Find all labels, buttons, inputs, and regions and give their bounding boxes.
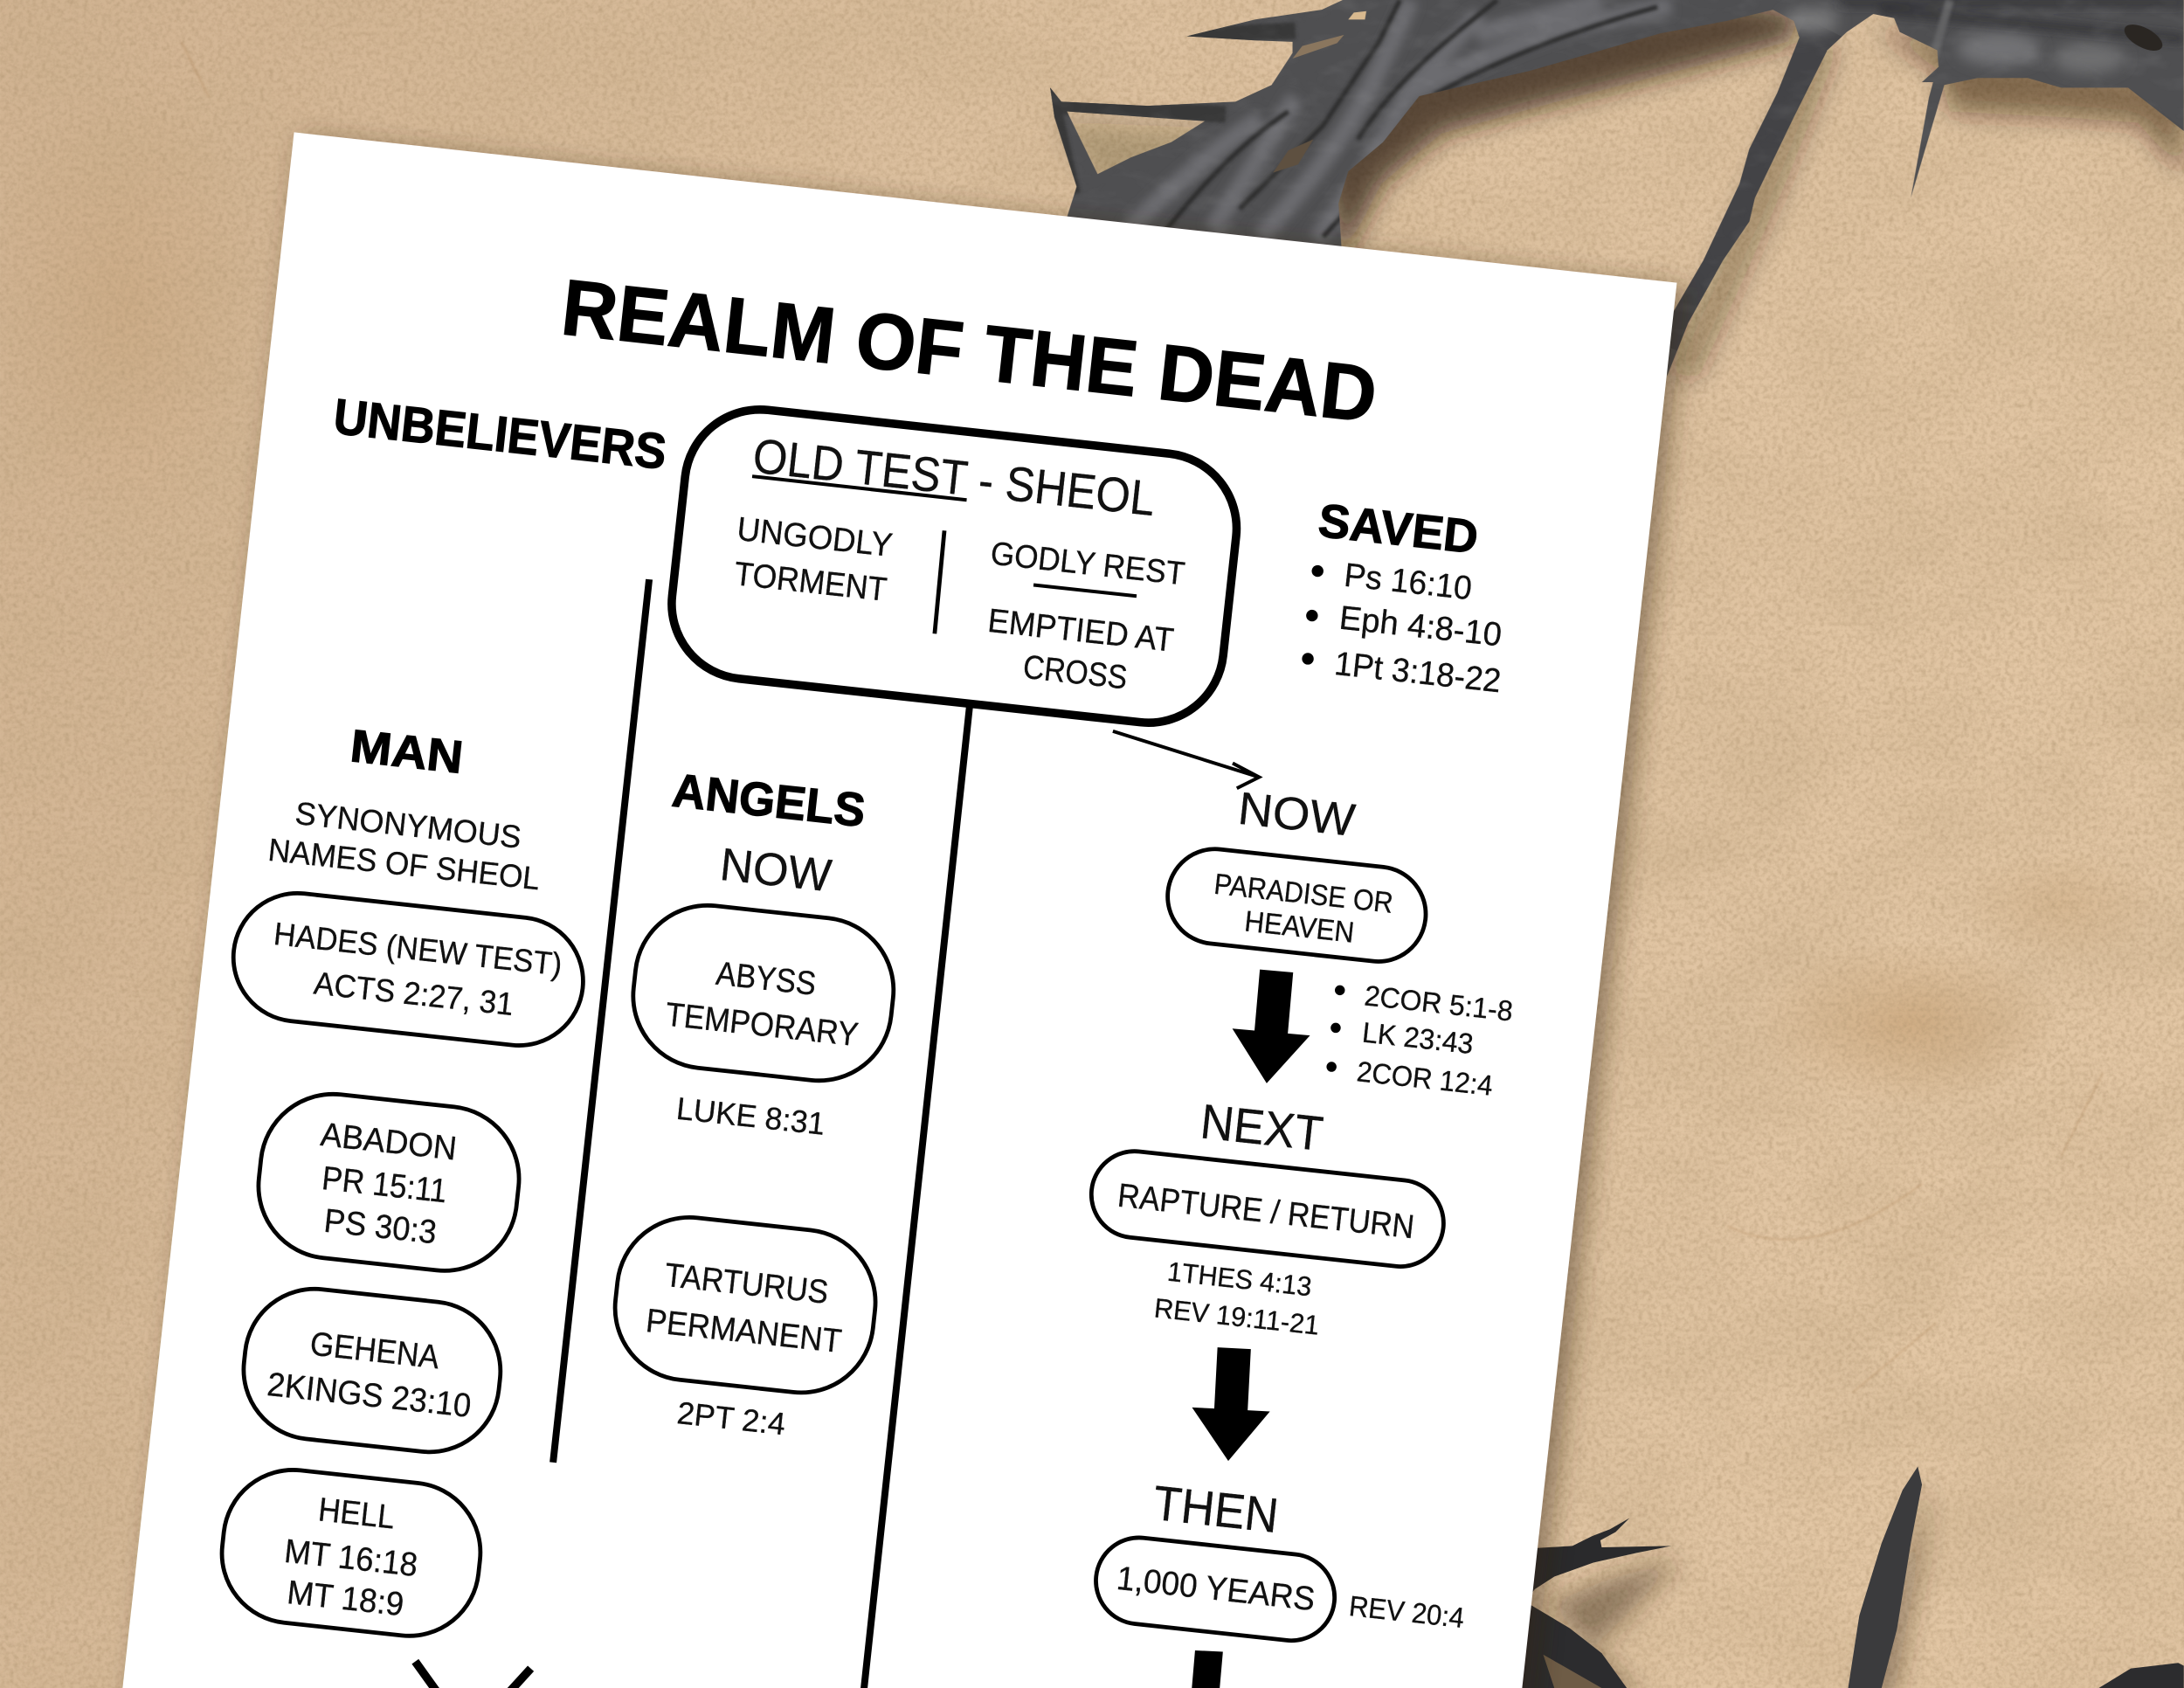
pill: hades: ACTS 2:27, 31 — [312, 965, 515, 1022]
pill: 1,000 years — [1091, 1533, 1339, 1645]
arrow: now to next — [1227, 967, 1316, 1087]
emptied at cross text — [986, 602, 1176, 696]
references: next — [1153, 1256, 1321, 1341]
pill: paradise or heaven: PARADISE OR — [1213, 868, 1394, 920]
paper shadow — [131, 138, 1685, 1688]
panel: old testament sheol box — [664, 402, 1244, 730]
panel: saved references — [1302, 495, 1503, 700]
column divider left — [553, 579, 649, 1463]
ungodly torment text: TORMENT — [732, 555, 888, 609]
pill: hell — [215, 1463, 487, 1643]
panel: white paper sheet — [121, 132, 1677, 1688]
pill: abyss: TEMPORARY — [664, 996, 860, 1054]
panel: angels column — [608, 764, 901, 1442]
pill: abadon: ABADON — [319, 1116, 459, 1168]
arrow: next to then — [1189, 1346, 1273, 1463]
label: now: NOW — [1235, 783, 1358, 847]
pill: rapture / return — [1087, 1147, 1448, 1271]
synonymous names text: NAMES OF SHEOL — [266, 832, 542, 896]
thin arrow to now — [1113, 731, 1259, 788]
pill: abyss — [625, 898, 901, 1088]
title: REALM OF THE DEAD — [557, 263, 1381, 439]
references: now: 2COR 12:4 — [1355, 1055, 1495, 1102]
pill: hell: MT 18:9 — [286, 1574, 405, 1623]
label: now: NOW — [717, 839, 834, 902]
arrow: then, cut off at the bottom — [1191, 1650, 1223, 1688]
emptied at cross text: EMPTIED AT — [986, 602, 1176, 660]
reference: 2 peter: 2PT 2:4 — [675, 1395, 787, 1442]
pill: abadon: PS 30:3 — [322, 1202, 439, 1251]
pill: hades: HADES (NEW TEST) — [272, 916, 563, 983]
pill: hades — [227, 887, 590, 1052]
reference list: Eph 4:8-10 — [1337, 599, 1503, 654]
pill: gehena: 2KINGS 23:10 — [266, 1366, 473, 1425]
pill: hell: HELL — [316, 1491, 397, 1537]
crown of thorns: top — [1045, 0, 2184, 390]
synonymous names text — [266, 795, 542, 896]
references: next: 1THES 4:13 — [1166, 1256, 1313, 1302]
reference: revelation 20:4: REV 20:4 — [1347, 1589, 1466, 1634]
heading: angels: ANGELS — [670, 764, 867, 837]
down chevron, cut off at the bottom — [415, 1662, 531, 1688]
pill: hell: MT 16:18 — [282, 1532, 419, 1584]
pill: tarturus — [608, 1210, 883, 1400]
ungodly torment text: UNGODLY — [736, 510, 895, 564]
pill: abyss: ABYSS — [714, 955, 818, 1003]
reference list: Ps 16:10 — [1342, 557, 1474, 607]
underline: godly rest — [1033, 585, 1137, 596]
pill: paradise or heaven — [1163, 844, 1431, 966]
pill: 1,000 years: 1,000 YEARS — [1115, 1560, 1317, 1618]
references: now — [1326, 979, 1515, 1102]
heading: man: MAN — [348, 720, 466, 784]
pill: abadon — [251, 1087, 527, 1278]
emptied at cross text: CROSS — [1021, 648, 1129, 696]
sheol heading: OLD TEST - SHEOL — [750, 427, 1158, 526]
synonymous names text: SYNONYMOUS — [294, 795, 523, 855]
pill: rapture / return: RAPTURE / RETURN — [1116, 1177, 1416, 1246]
references: now: 2COR 5:1-8 — [1363, 979, 1515, 1027]
panel: saved timeline column — [1087, 731, 1515, 1688]
pill: gehena — [237, 1282, 508, 1459]
crown of thorns: bottom thorns — [1516, 1467, 2184, 1688]
references: now: LK 23:43 — [1361, 1016, 1475, 1060]
pill: paradise or heaven: HEAVEN — [1243, 905, 1356, 950]
godly rest text: GODLY REST — [989, 535, 1186, 591]
heading: saved: SAVED — [1316, 495, 1481, 564]
divider — [935, 530, 944, 633]
reference list — [1302, 557, 1503, 700]
reference list: 1Pt 3:18-22 — [1332, 645, 1503, 700]
crown shadow — [1059, 0, 2184, 376]
pill: gehena: GEHENA — [308, 1325, 441, 1376]
heading: unbelievers: UNBELIEVERS — [331, 389, 669, 481]
column divider right — [864, 708, 970, 1688]
references: next: REV 19:11-21 — [1153, 1292, 1321, 1341]
underline: old test — [752, 476, 967, 500]
pill: abadon: PR 15:11 — [320, 1159, 449, 1210]
pill: tarturus: TARTURUS — [663, 1256, 830, 1311]
label: next: NEXT — [1198, 1093, 1326, 1161]
label: then: THEN — [1151, 1475, 1282, 1543]
ungodly torment text — [732, 510, 895, 609]
pill: tarturus: PERMANENT — [644, 1302, 843, 1360]
reference: luke: LUKE 8:31 — [674, 1091, 826, 1142]
panel: man column — [215, 720, 590, 1688]
